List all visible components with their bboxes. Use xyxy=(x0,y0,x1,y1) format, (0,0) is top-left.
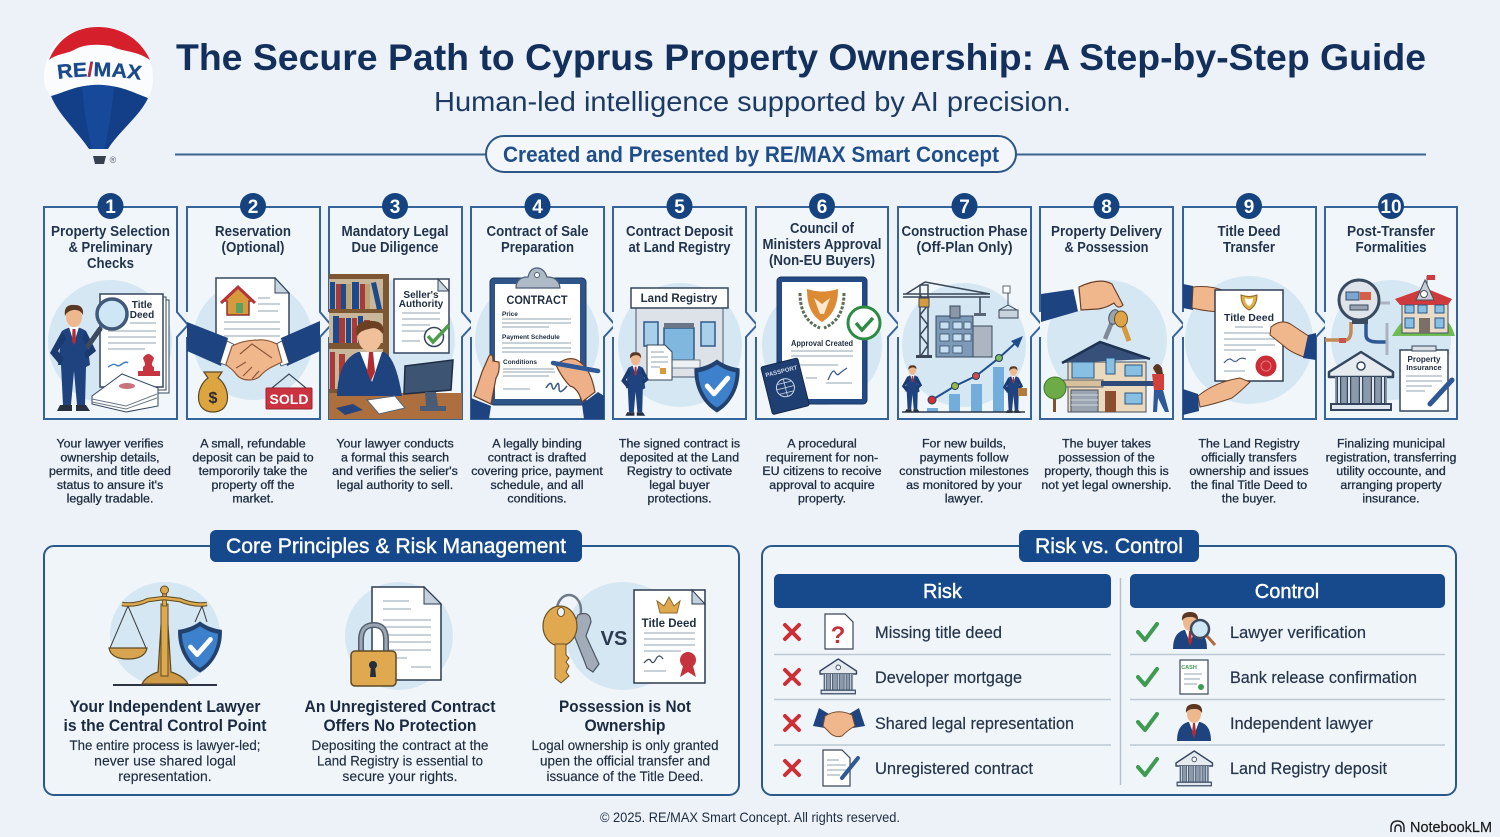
panel heading tab: Core Principles & Risk Management xyxy=(226,534,566,558)
step 5: contract deposit xyxy=(613,207,757,419)
title step 6: Council of xyxy=(790,221,854,237)
illustration: lawyer at desk with bookshelf xyxy=(329,274,462,419)
illustration: handshake, money bag and sold sign: $ xyxy=(209,390,218,407)
control row: independent lawyer: Independent lawyer xyxy=(1230,714,1373,733)
description step 4: conditions. xyxy=(507,492,567,506)
column header: risk: Risk xyxy=(923,581,963,603)
description step 5: protections. xyxy=(647,492,712,506)
title step 7: Construction Phase xyxy=(902,224,1028,240)
description step 4: contract is drafted xyxy=(488,450,586,464)
illustration: lawyer checking title deed: Deed xyxy=(130,310,154,321)
illustration: approval certificate and passport: PASSPORT xyxy=(765,365,798,379)
badge 3: 3 xyxy=(390,197,400,218)
risk row: unregistered contract: Unregistered contract xyxy=(875,759,1033,778)
risk row: missing title deed: ? xyxy=(831,622,845,649)
description step 6: A procedural xyxy=(787,436,857,450)
column header: control: Control xyxy=(1255,581,1319,603)
risk row: developer mortgage xyxy=(785,659,1022,694)
risk row: shared legal representation: Shared legal representation xyxy=(875,714,1074,733)
description step 1: permits, and title deed xyxy=(49,464,171,478)
illustration: lawyer at desk with bookshelf: Authority xyxy=(399,299,444,310)
step 8: property delivery xyxy=(1040,207,1184,419)
illustration: approval certificate and passport: Approval Created xyxy=(791,338,853,348)
heading: independent lawyer: Your Independent Lawyer xyxy=(70,697,261,716)
title step 1: & Preliminary xyxy=(68,240,153,256)
text: independent lawyer: never use shared logal xyxy=(94,752,236,768)
icon: scales and shield xyxy=(109,582,222,686)
control row: bank release confirmation: CASH xyxy=(1181,665,1197,671)
illustration: handshake, money bag and sold sign: SOLD xyxy=(270,391,308,407)
badge 6: 6 xyxy=(817,197,827,218)
badge 9 xyxy=(1236,193,1262,219)
description step 6: approval to acquire xyxy=(769,478,875,492)
text: unregistered contract: secure your rights. xyxy=(342,768,458,784)
description step 4: covering price, payment xyxy=(471,464,603,478)
badge 8 xyxy=(1094,193,1120,219)
heading: possession: Possession is Not xyxy=(559,697,691,716)
badge 3 xyxy=(382,193,408,219)
icon: document and padlock xyxy=(345,582,453,690)
illustration: clipboard with contract and signing hands: Conditions xyxy=(503,359,537,366)
step 3: due diligence xyxy=(329,207,473,419)
badge 4: 4 xyxy=(532,197,543,218)
title step 10: Post-Transfer xyxy=(1347,224,1435,240)
step descriptions xyxy=(49,436,1457,506)
description step 4: A legally binding xyxy=(492,436,582,450)
icon: keys versus title deed: Title Deed xyxy=(642,618,696,630)
column header: control xyxy=(1130,574,1445,608)
title step 9: Transfer xyxy=(1223,240,1275,256)
illustration: title deed between hands: Title Deed xyxy=(1224,312,1274,324)
NotebookLM mark: NotebookLM xyxy=(1410,820,1492,836)
badge 1: 1 xyxy=(105,197,116,218)
text: independent lawyer: The entire process is lawyer-led; xyxy=(70,737,260,753)
presenter banner xyxy=(175,136,1426,172)
badge 9: 9 xyxy=(1244,197,1254,218)
title step 9: Title Deed xyxy=(1218,224,1280,240)
step 7: construction phase xyxy=(898,207,1042,419)
illustration: meter, town hall, bank and insurance: Insurance xyxy=(1406,363,1442,372)
badge 4 xyxy=(524,193,550,219)
subtitle: Human-led intelligence supported by AI precision. xyxy=(434,86,1071,117)
illustration: keys handed over above a house xyxy=(1041,280,1169,412)
panel: core principles xyxy=(44,530,739,795)
illustration: meter, town hall, bank and insurance: Property xyxy=(1408,355,1441,364)
title step 7: (Off-Plan Only) xyxy=(916,240,1013,256)
description step 9: officially transfers xyxy=(1201,450,1297,464)
risk row: developer mortgage: Developer mortgage xyxy=(875,668,1022,687)
title step 5: at Land Registry xyxy=(628,240,731,256)
description step 3: and verifies the selier's xyxy=(332,464,458,478)
icon: keys versus title deed xyxy=(543,582,705,690)
heading: unregistered contract: Offers No Protection xyxy=(324,716,476,735)
description step 2: A small, refundable xyxy=(200,436,306,450)
illustration: lawyer at desk with bookshelf: Seller's xyxy=(403,290,439,301)
badge 5: 5 xyxy=(674,197,685,218)
control row: land registry deposit xyxy=(1138,751,1387,786)
description step 10: insurance. xyxy=(1362,492,1420,506)
description step 9: the final Title Deed to xyxy=(1191,478,1307,492)
description step 3: Your lawyer conducts xyxy=(336,436,454,450)
badge 2: 2 xyxy=(248,197,258,218)
description step 8: not yet legal ownership. xyxy=(1041,478,1172,492)
title step 6: (Non-EU Buyers) xyxy=(769,253,875,269)
description step 10: arranging property xyxy=(1340,478,1442,492)
badge 8: 8 xyxy=(1101,197,1112,218)
description step 7: as monitored by your xyxy=(906,478,1022,492)
illustration: clipboard with contract and signing hands: Price xyxy=(502,311,518,318)
logo: RE/MAX balloon xyxy=(44,27,153,165)
risk row: shared legal representation xyxy=(785,708,1074,737)
description step 7: construction milestones xyxy=(899,464,1029,478)
panel heading tab xyxy=(1019,530,1199,562)
illustration: clipboard with contract and signing hands xyxy=(471,268,604,419)
title step 2: Reservation xyxy=(215,224,291,240)
description step 10: registration, transferring xyxy=(1326,450,1457,464)
risk row: missing title deed xyxy=(785,614,1002,649)
illustration: crane, building and milestone chart xyxy=(902,282,1027,413)
title step 4: Preparation xyxy=(501,240,574,256)
control row: lawyer verification xyxy=(1138,612,1366,649)
description step 2: tempororily take the xyxy=(199,464,308,478)
illustration: lawyer checking title deed xyxy=(48,280,172,412)
step 9: title deed transfer xyxy=(1183,207,1327,419)
description step 5: Registry to octivate xyxy=(627,464,732,478)
description step 8: property, though this is xyxy=(1044,464,1169,478)
description step 1: Your lawyer verifies xyxy=(57,436,163,450)
badge 7 xyxy=(952,193,978,219)
control row: bank release confirmation xyxy=(1138,660,1417,694)
illustration: approval certificate and passport xyxy=(761,277,882,415)
step 2: reservation xyxy=(187,207,331,419)
description step 9: The Land Registry xyxy=(1198,436,1300,450)
title step 8: Property Delivery xyxy=(1051,224,1162,240)
illustration: land registry building and shield xyxy=(618,283,742,416)
text: unregistered contract: Land Registry is essential to xyxy=(317,752,483,768)
description step 9: ownership and issues xyxy=(1189,464,1309,478)
panel: risk vs control xyxy=(762,530,1456,795)
description step 5: deposited at the Land xyxy=(620,450,739,464)
badge 6 xyxy=(809,193,835,219)
illustration: land registry building and shield: Land Registry xyxy=(641,293,718,305)
badge 10 xyxy=(1378,193,1404,219)
description step 8: possession of the xyxy=(1058,450,1155,464)
presenter banner: Created and Presented by RE/MAX Smart Concept xyxy=(503,142,1000,167)
description step 4: schedule, and all xyxy=(490,478,584,492)
description step 2: property off the xyxy=(211,478,295,492)
badge 1 xyxy=(98,193,124,219)
step 4: contract preparation xyxy=(471,207,615,419)
description step 6: requirement for non- xyxy=(766,450,878,464)
description step 3: a formal this search xyxy=(341,450,449,464)
description step 6: property. xyxy=(798,492,846,506)
description step 10: Finalizing municipal xyxy=(1337,436,1445,450)
panel heading tab: Risk vs. Control xyxy=(1035,534,1183,558)
risk row: unregistered contract xyxy=(785,750,1033,786)
badge 2 xyxy=(240,193,266,219)
illustration: title deed between hands xyxy=(1183,276,1316,415)
title step 1: Property Selection xyxy=(51,224,170,240)
badge 7: 7 xyxy=(959,197,970,218)
heading: possession: Ownership xyxy=(584,716,666,735)
step number badges xyxy=(98,193,1404,219)
illustration: lawyer checking title deed: Title xyxy=(132,300,153,311)
title step 8: & Possession xyxy=(1064,240,1148,256)
logo: RE/MAX balloon: RE/MAX xyxy=(58,62,142,80)
column header: risk xyxy=(774,574,1111,608)
description step 5: legal buyer xyxy=(649,478,710,492)
risk row: missing title deed: Missing title deed xyxy=(875,623,1002,642)
step titles xyxy=(51,221,1435,272)
text: independent lawyer: representation. xyxy=(118,768,212,784)
title step 6: Ministers Approval xyxy=(762,237,882,253)
description step 1: legally tradable. xyxy=(67,492,153,506)
illustration: handshake, money bag and sold sign xyxy=(187,278,320,412)
description step 6: EU citizens to recoive xyxy=(762,464,882,478)
control row: land registry deposit: Land Registry deposit xyxy=(1230,759,1387,778)
control row: lawyer verification: Lawyer verification xyxy=(1230,623,1366,642)
badge 10: 10 xyxy=(1380,197,1402,218)
footer copyright: © 2025. RE/MAX Smart Concept. All rights reserved. xyxy=(600,809,900,825)
logo: RE/MAX balloon: ® xyxy=(110,155,117,165)
description step 7: lawyer. xyxy=(945,492,983,506)
description step 8: The buyer takes xyxy=(1062,436,1151,450)
text: unregistered contract: Depositing the contract at the xyxy=(312,737,489,753)
step 6: council approval xyxy=(756,207,899,419)
control row: bank release confirmation: Bank release confirmation xyxy=(1230,668,1417,687)
text: possession: issuance of the Title Deed. xyxy=(546,768,704,784)
description step 1: status to ansure it's xyxy=(57,478,163,492)
text: possession: upen the official transfer and xyxy=(540,752,710,768)
description step 2: market. xyxy=(232,492,274,506)
heading: independent lawyer: is the Central Control Point xyxy=(64,716,267,735)
title step 2: (Optional) xyxy=(222,240,285,256)
title step 4: Contract of Sale xyxy=(486,224,589,240)
description step 1: ownership details, xyxy=(60,450,160,464)
panel heading tab xyxy=(210,530,582,562)
title step 10: Formalities xyxy=(1356,240,1427,256)
description step 9: the buyer. xyxy=(1222,492,1276,506)
illustration: clipboard with contract and signing hands: Payment Schedule xyxy=(502,334,560,341)
step 10: post-transfer formalities xyxy=(1325,207,1457,419)
illustration: clipboard with contract and signing hands: CONTRACT xyxy=(506,293,568,307)
control row: independent lawyer xyxy=(1138,704,1373,741)
title: The Secure Path to Cyprus Property Ownership: A Step-by-Step Guide xyxy=(176,37,1426,78)
step 1: property selection xyxy=(44,207,188,419)
description step 3: legal authority to sell. xyxy=(337,478,453,492)
text: possession: Logal ownership is only granted xyxy=(532,737,718,753)
description step 5: The signed contract is xyxy=(619,436,740,450)
description step 7: payments follow xyxy=(920,450,1008,464)
icon: keys versus title deed: VS xyxy=(601,628,627,650)
title step 3: Due Diligence xyxy=(352,240,439,256)
title step 1: Checks xyxy=(87,256,134,272)
illustration: meter, town hall, bank and insurance xyxy=(1325,275,1455,411)
description step 7: For new builds, xyxy=(922,436,1006,450)
badge 5 xyxy=(666,193,692,219)
description step 10: utility occounte, and xyxy=(1336,464,1446,478)
title step 5: Contract Deposit xyxy=(626,224,733,240)
heading: unregistered contract: An Unregistered Contract xyxy=(304,697,496,716)
description step 2: deposit can be paid to xyxy=(192,450,314,464)
title step 3: Mandatory Legal xyxy=(342,224,448,240)
